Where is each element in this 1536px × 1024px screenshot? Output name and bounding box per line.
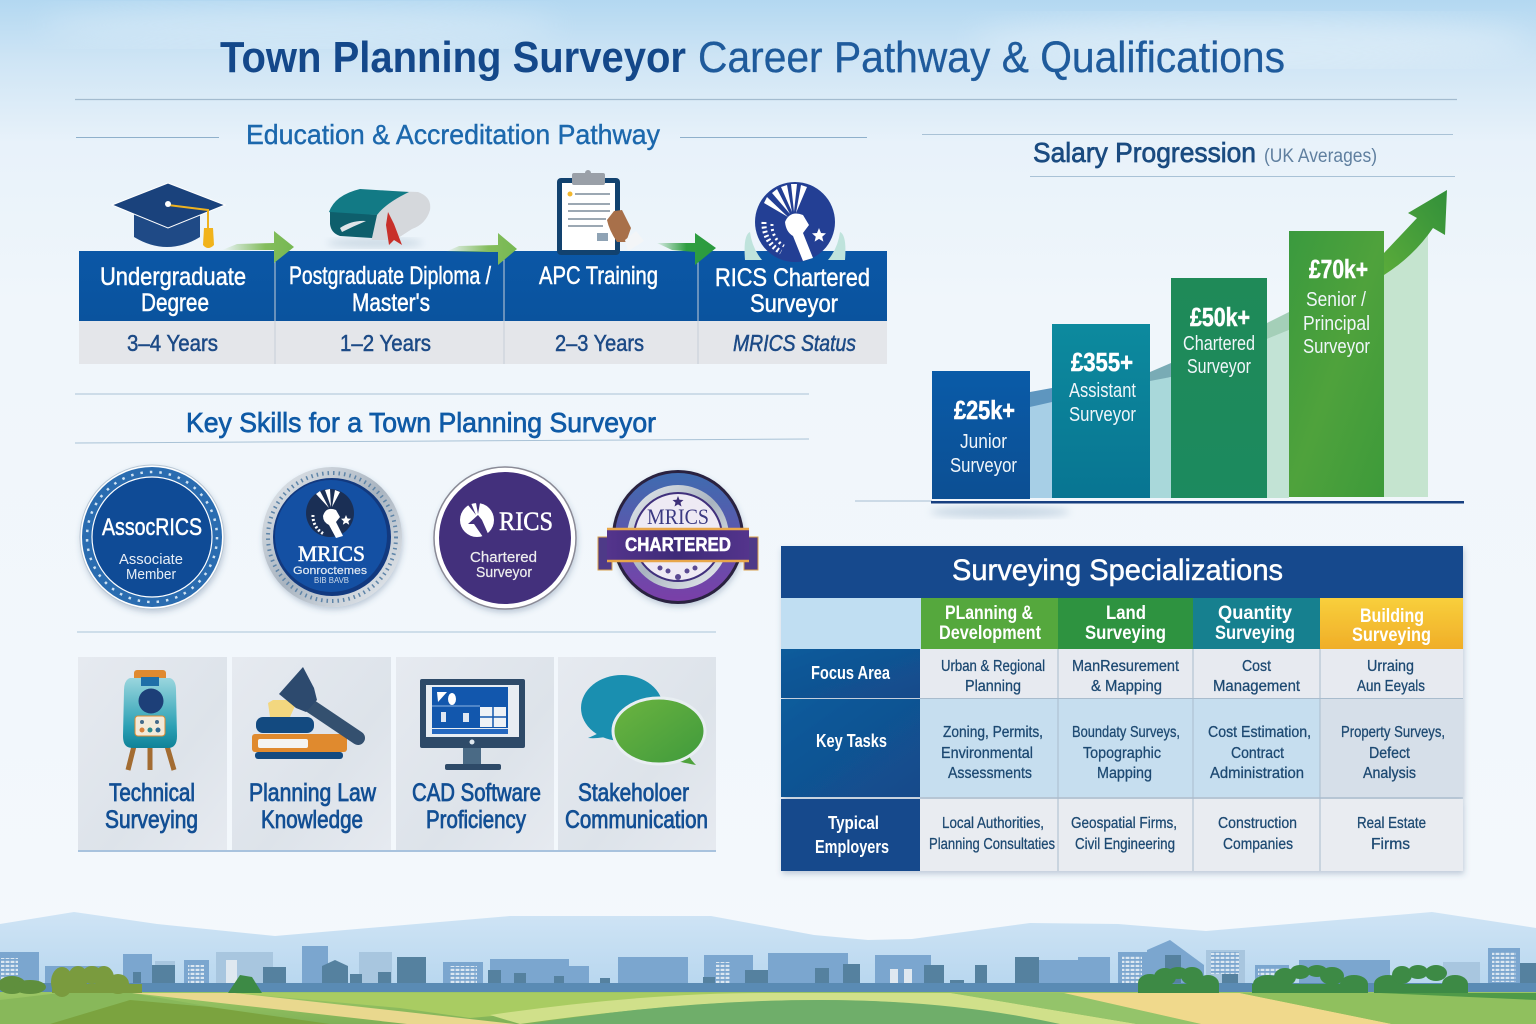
- row: key tasks: Assessments: [948, 765, 1032, 782]
- heading: salary progression: [1033, 137, 1377, 168]
- bar: assistant surveyor: £355+: [1071, 347, 1133, 377]
- heading: key skills: Key Skills for a Town Planning Surveyor: [186, 407, 656, 438]
- card: technical surveying: [105, 670, 198, 834]
- row: key tasks: Cost Estimation,: [1208, 724, 1311, 741]
- row: focus area: Urraing: [1367, 658, 1414, 675]
- badge: RICS chartered surveyor: Surveyor: [476, 564, 532, 581]
- arrow: degree to diploma: [222, 231, 294, 263]
- badge: AssocRICS: Member: [126, 566, 176, 583]
- row labels: Key Tasks: [816, 731, 887, 751]
- step 4: RICS chartered surveyor: RICS Chartered: [715, 264, 870, 292]
- row: typical employers: Companies: [1223, 836, 1293, 853]
- row: key tasks: Zoning, Permits,: [943, 724, 1043, 741]
- badge: MRICS chartered ribbon: CHARTERED: [625, 535, 731, 556]
- panel: surveying specializations table: [781, 546, 1463, 871]
- arrow: rising salary: [1384, 190, 1447, 275]
- arrow: training to chartered: [657, 233, 716, 265]
- row: focus area: & Mapping: [1091, 678, 1162, 695]
- icon: RICS emblem: [745, 182, 845, 262]
- icon: CAD monitor: [420, 679, 525, 770]
- bar: senior principal surveyor: £70k+: [1309, 254, 1368, 284]
- panel: education pathway: [76, 119, 887, 364]
- row: typical employers: Real Estate: [1357, 815, 1426, 832]
- icon: speech bubbles: [581, 675, 705, 765]
- heading: education pathway: Education & Accreditation Pathway: [246, 119, 660, 150]
- bar chart: salary bars: [855, 190, 1464, 518]
- card: stakeholder communication: Communication: [565, 806, 708, 834]
- bar: senior principal surveyor: Senior /: [1306, 289, 1366, 311]
- landscape: skyline and fields: [0, 912, 1536, 1024]
- badge: MRICS: MRICS: [298, 541, 365, 566]
- row: typical employers: Geospatial Firms,: [1071, 815, 1177, 832]
- step 1: undergraduate degree: Undergraduate: [100, 263, 246, 291]
- column headers: Building: [1360, 606, 1424, 627]
- row labels: [781, 649, 920, 871]
- column headers: Development: [939, 623, 1042, 644]
- column headers: Surveying: [1352, 625, 1431, 646]
- panel: key skills: [75, 394, 809, 609]
- row: focus area: Aun Eeyals: [1357, 678, 1425, 695]
- bar: junior surveyor: Junior: [960, 431, 1007, 453]
- row: key tasks: Property Surveys,: [1341, 724, 1445, 741]
- column headers: Surveying: [1215, 623, 1295, 644]
- row: typical employers: Local Authorities,: [942, 815, 1044, 832]
- card: stakeholder communication: [565, 675, 708, 834]
- badge: MRICS chartered ribbon: MRICS: [647, 504, 709, 529]
- bar: chartered surveyor: £50k+: [1190, 302, 1250, 332]
- row: key tasks: Contract: [1231, 745, 1284, 762]
- step 3: APC training: 2–3 Years: [555, 330, 644, 356]
- bar: assistant surveyor: Assistant: [1069, 380, 1136, 402]
- step 4: RICS chartered surveyor: Surveyor: [750, 290, 838, 318]
- row: focus area: Urban & Regional: [941, 658, 1045, 675]
- panel: skill cards: [78, 657, 716, 851]
- badge: RICS chartered surveyor: [434, 467, 576, 609]
- row labels: Focus Area: [811, 663, 891, 683]
- row: focus area: Cost: [1242, 658, 1271, 675]
- icon: graduation cap: [112, 183, 225, 248]
- column headers: Surveying: [1085, 623, 1166, 644]
- bar: assistant surveyor: [1052, 324, 1150, 498]
- step 4: RICS chartered surveyor: MRICS Status: [733, 330, 856, 356]
- heading: salary progression: (UK Averages): [1264, 146, 1377, 167]
- badge: MRICS: Gonroctemes: [293, 565, 368, 577]
- column headers: PLanning &: [945, 603, 1033, 624]
- card: stakeholder communication: Stakeholoer: [578, 779, 689, 807]
- card: planning law knowledge: Knowledge: [261, 806, 363, 834]
- bar: chartered surveyor: [1171, 278, 1267, 498]
- step 4: RICS chartered surveyor: [715, 264, 870, 356]
- row: key tasks: Analysis: [1363, 765, 1416, 782]
- bar: junior surveyor: [932, 371, 1030, 499]
- step 3: APC training: APC Training: [539, 262, 658, 290]
- card: planning law knowledge: [249, 667, 377, 834]
- bar: senior principal surveyor: Principal: [1303, 313, 1370, 335]
- card: CAD software proficiency: CAD Software: [412, 779, 541, 807]
- row: focus area: Management: [1213, 678, 1301, 695]
- title: Career Pathway & Qualifications: [698, 33, 1285, 82]
- row labels: Employers: [815, 837, 889, 857]
- row labels: Typical: [828, 813, 879, 833]
- step 2: postgraduate diploma: [289, 262, 491, 356]
- pathway table: [79, 251, 887, 364]
- panel: salary progression: [855, 134, 1464, 518]
- card: technical surveying: Surveying: [105, 806, 198, 834]
- column headers: Quantity: [1218, 603, 1292, 624]
- heading: salary progression: Salary Progression: [1033, 137, 1256, 168]
- badge: RICS chartered surveyor: RICS: [499, 507, 553, 536]
- badge: MRICS chartered ribbon: [598, 470, 758, 604]
- bar: assistant surveyor: Surveyor: [1069, 404, 1136, 426]
- card: CAD software proficiency: [412, 679, 541, 834]
- step 2: postgraduate diploma: Postgraduate Diploma /: [289, 262, 491, 290]
- step 2: postgraduate diploma: Master's: [352, 289, 430, 317]
- step 3: APC training: [539, 262, 658, 356]
- title: Town Planning Surveyor: [220, 33, 686, 82]
- row: typical employers: Construction: [1218, 815, 1297, 832]
- bar: chartered surveyor: Surveyor: [1187, 356, 1251, 378]
- row: key tasks: Topographic: [1083, 745, 1161, 762]
- row: focus area: [941, 658, 1425, 695]
- icon: clipboard with hand: [557, 170, 644, 255]
- icon: book and diploma: [327, 189, 430, 248]
- icon: gavel and books: [252, 667, 358, 759]
- row: typical employers: [929, 815, 1426, 853]
- row: key tasks: [941, 724, 1445, 782]
- badge: MRICS: BIB BAVB: [314, 576, 349, 585]
- row: key tasks: Administration: [1210, 765, 1304, 782]
- row: focus area: ManResurement: [1072, 658, 1179, 675]
- badge: AssocRICS: [80, 465, 224, 609]
- arrow: diploma to training: [445, 233, 517, 265]
- row: focus area: Planning: [965, 678, 1021, 695]
- badge: AssocRICS: AssocRICS: [102, 514, 202, 541]
- column headers: Land: [1106, 603, 1146, 624]
- title: [220, 33, 1285, 82]
- row: key tasks: Defect: [1369, 745, 1410, 762]
- row backgrounds: [920, 649, 1463, 871]
- icon: total station: [123, 670, 177, 770]
- card: CAD software proficiency: Proficiency: [426, 806, 526, 834]
- badge: MRICS: [262, 467, 402, 607]
- bar: junior surveyor: Surveyor: [950, 455, 1017, 477]
- step 1: undergraduate degree: Degree: [141, 289, 209, 317]
- row: key tasks: Boundaty Surveys,: [1072, 724, 1180, 741]
- bar: senior principal surveyor: Surveyor: [1303, 336, 1370, 358]
- step 1: undergraduate degree: 3–4 Years: [127, 330, 218, 356]
- table header: [781, 546, 1463, 598]
- table header: Surveying Specializations: [952, 554, 1283, 587]
- row: typical employers: Planning Consultaties: [929, 836, 1055, 853]
- step 2: postgraduate diploma: 1–2 Years: [340, 330, 431, 356]
- row: typical employers: Civil Engineering: [1075, 836, 1175, 853]
- card: technical surveying: Technical: [109, 779, 195, 807]
- row: key tasks: Mapping: [1097, 765, 1152, 782]
- bar: chartered surveyor: Chartered: [1183, 333, 1255, 355]
- row: typical employers: Firms: [1371, 836, 1410, 853]
- column headers: [921, 598, 1463, 649]
- bar: senior principal surveyor: [1289, 231, 1384, 497]
- row: key tasks: Environmental: [941, 745, 1033, 762]
- card: planning law knowledge: Planning Law: [249, 779, 377, 807]
- step 1: undergraduate degree: [100, 263, 246, 356]
- bar: junior surveyor: £25k+: [954, 395, 1015, 425]
- badge: AssocRICS: Associate: [119, 551, 183, 568]
- badge: RICS chartered surveyor: Chartered: [470, 549, 537, 566]
